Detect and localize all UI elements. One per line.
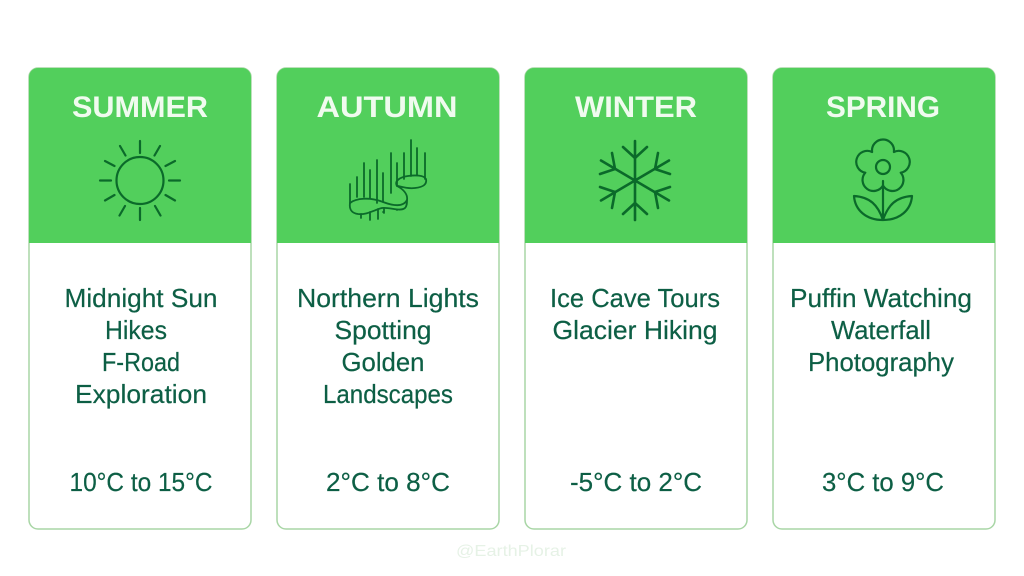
activities: spring: Waterfall [831,315,931,345]
activities: autumn: Northern Lights [297,283,479,313]
panel: summer [29,68,251,529]
activities: spring [790,283,972,377]
panel: spring [773,68,995,529]
activities: spring: Photography [808,347,954,377]
temperature: autumn: 2°C to 8°C [326,467,450,497]
panel: autumn [277,68,499,529]
icon: flower [854,140,912,220]
activities: winter [550,283,720,345]
temperature: spring: 3°C to 9°C [822,467,944,497]
activities: autumn: Golden [342,347,424,377]
heading: winter: WINTER [575,91,697,124]
activities: summer: Hikes [105,315,167,345]
activities: winter: Ice Cave Tours [550,283,720,313]
activities: summer: F-Road [102,347,180,377]
activities: summer: Midnight Sun [64,283,218,313]
activities: winter: Glacier Hiking [552,315,718,345]
temperature: winter: -5°C to 2°C [570,467,702,497]
activities: autumn [297,283,479,409]
activities: autumn: Landscapes [323,379,453,409]
watermark: @EarthPlorar [456,543,567,560]
temperature: summer: 10°C to 15°C [70,467,212,497]
activities: spring: Puffin Watching [790,283,972,313]
activities: summer [64,283,218,409]
icon: northern lights [350,140,426,220]
heading: spring: SPRING [826,91,940,124]
heading: autumn: AUTUMN [316,91,458,124]
activities: summer: Exploration [75,379,207,409]
panel: winter [525,68,747,529]
heading: summer: SUMMER [72,91,208,124]
icon: snowflake [600,141,670,220]
icon: sun [100,141,180,220]
activities: autumn: Spotting [334,315,432,345]
